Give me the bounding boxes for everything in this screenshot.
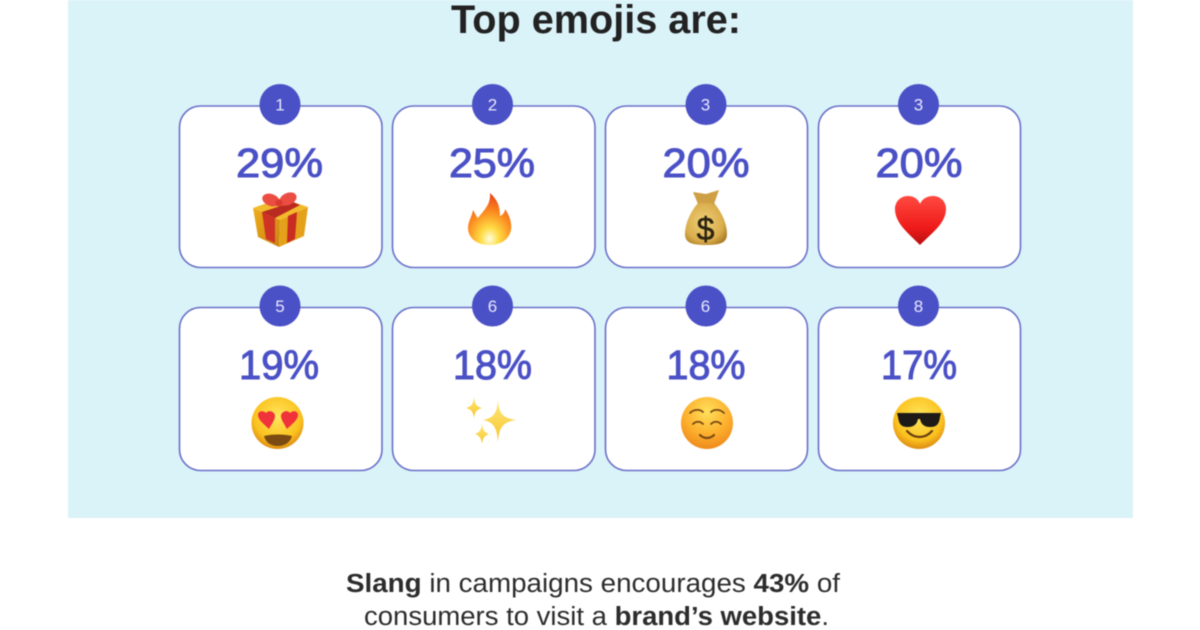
card: rank 3, 20%, heart <box>818 84 1020 268</box>
card: rank 2, 25%, fire: 2 <box>488 96 497 114</box>
footer text <box>346 570 841 630</box>
icon: money bag: $ <box>697 211 715 247</box>
card: rank 6, 18%, sparkles: 6 <box>488 297 497 316</box>
card: rank 5, 19%, heart eyes: 5 <box>275 297 285 316</box>
card: rank 5, 19%, heart eyes: 19% <box>239 342 319 388</box>
card: rank 3, 20%, money bag <box>606 84 808 268</box>
card: rank 3, 20%, heart: 20% <box>876 140 962 186</box>
card: rank 1, 29%, gift <box>180 84 382 268</box>
card: rank 8, 17%, sunglasses face: 8 <box>914 297 923 316</box>
card: rank 2, 25%, fire: 25% <box>449 140 535 186</box>
card: rank 1, 29%, gift: 29% <box>236 140 323 186</box>
icon: smiling face <box>681 397 733 449</box>
card: rank 6, 18%, smiling face: 6 <box>701 297 710 316</box>
card: rank 6, 18%, sparkles <box>392 286 595 470</box>
icon: sparkles <box>466 397 516 444</box>
background panel <box>68 0 1133 518</box>
card: rank 8, 17%, sunglasses face: 17% <box>881 342 957 388</box>
card: rank 1, 29%, gift: 1 <box>275 96 285 114</box>
card: rank 6, 18%, sparkles: 18% <box>453 342 532 388</box>
card: rank 3, 20%, heart: 3 <box>914 96 923 114</box>
card: rank 2, 25%, fire <box>392 84 595 268</box>
card: rank 3, 20%, money bag: 3 <box>701 96 710 114</box>
card: rank 3, 20%, money bag: 20% <box>662 140 750 186</box>
icon: sunglasses face <box>893 397 945 449</box>
card: rank 6, 18%, smiling face: 18% <box>666 342 746 388</box>
icon: gift <box>253 190 308 247</box>
card: rank 5, 19%, heart eyes <box>180 286 382 470</box>
icon: heart eyes face <box>252 397 304 449</box>
card: rank 6, 18%, smiling face <box>606 286 808 470</box>
footer text: Slang in campaigns encourages 43% of <box>346 570 841 598</box>
icon: heart <box>895 196 946 245</box>
card: rank 8, 17%, sunglasses face <box>818 286 1020 470</box>
icon: money bag <box>685 190 727 247</box>
icon: fire <box>468 193 511 245</box>
